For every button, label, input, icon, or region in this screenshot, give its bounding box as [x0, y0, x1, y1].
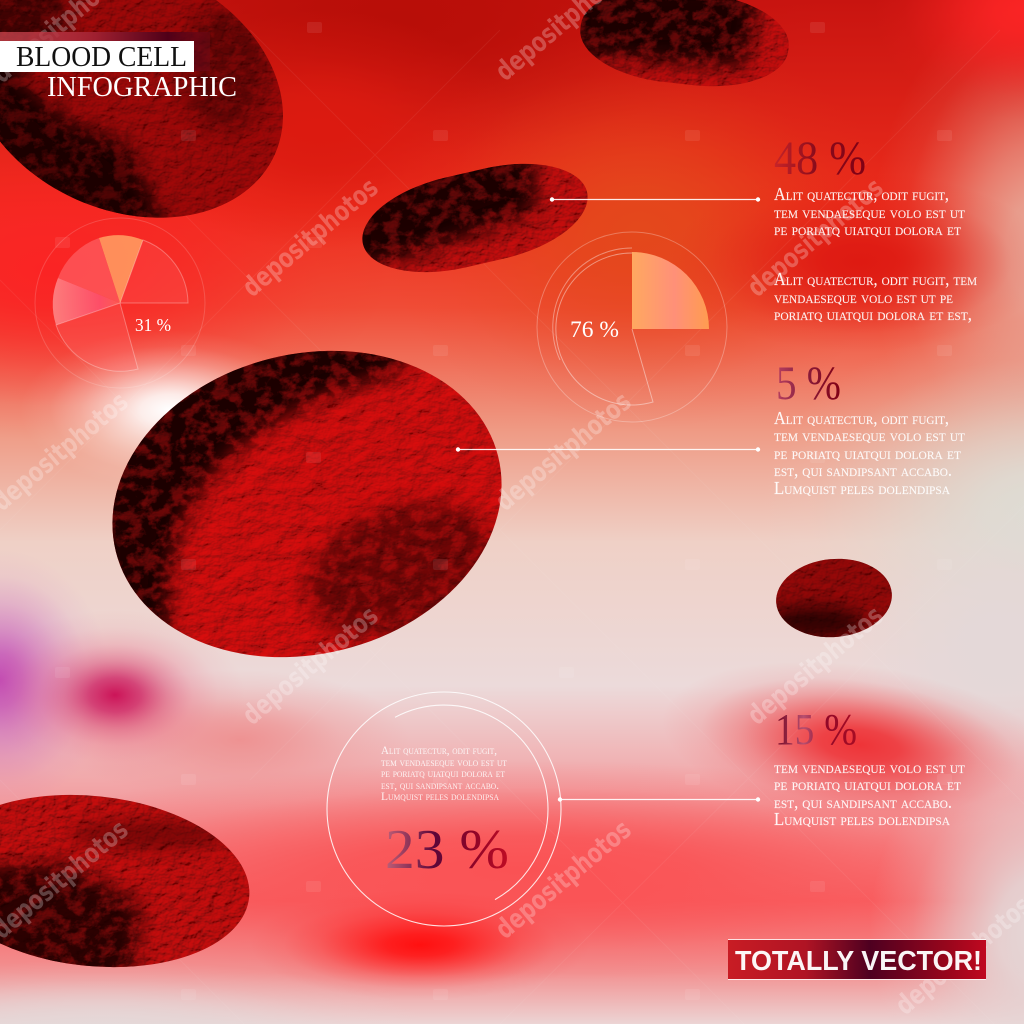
- callout text: Alit quatectur, odit fugit,: [381, 743, 497, 757]
- callout text: tem vendaeseque volo est ut: [381, 755, 507, 769]
- stat: 15 percent: [774, 705, 966, 829]
- 76 percent label: 76 %: [570, 317, 619, 342]
- callout text: est, qui sandipsant accabo.: [381, 778, 499, 792]
- text block: 48 percent: Alit quatectur, odit fugit,: [774, 184, 949, 204]
- red cell: top left: [0, 0, 283, 218]
- text block: 15 percent: Lumquist peles dolendipsa: [774, 809, 950, 829]
- watermark: depositphotos repeated: depositphotos: [742, 172, 889, 303]
- red cell: right small: [776, 558, 892, 638]
- stat: 5 percent: 5 %: [776, 357, 841, 410]
- watermark: depositphotos repeated: depositphotos: [742, 600, 889, 731]
- 31 percent label: 31 %: [135, 315, 171, 335]
- stat: 48 percent: 48 %: [774, 132, 866, 185]
- callout text: Lumquist peles dolendipsa: [381, 789, 499, 803]
- text block: 5 percent: tem vendaeseque volo est ut: [774, 425, 966, 445]
- watermark: depositphotos repeated: depositphotos: [237, 172, 384, 303]
- pie chart: 76 percent: [537, 232, 727, 422]
- text block: 5 percent: Lumquist peles dolendipsa: [774, 478, 950, 498]
- text block: middle paragraph: [774, 269, 977, 324]
- title: BLOOD CELL: [16, 41, 187, 73]
- stat: 15 percent: 15 %: [775, 705, 857, 754]
- text block: 5 percent: Alit quatectur, odit fugit,: [774, 408, 949, 428]
- pie chart: 31 percent: [35, 218, 205, 388]
- text block: middle paragraph: poriatq uiatqui dolora et est,: [774, 304, 972, 324]
- title: [0, 32, 237, 103]
- text block: 48 percent: [774, 184, 966, 239]
- badge: totally vector: TOTALLY VECTOR!: [735, 945, 982, 976]
- text block: 15 percent: est, qui sandipsant accabo.: [774, 792, 952, 812]
- text block: 5 percent: est, qui sandipsant accabo.: [774, 460, 952, 480]
- connector: large cell to 5 percent: [456, 447, 760, 452]
- text block: middle paragraph: vendaeseque volo est ut pe: [774, 287, 953, 307]
- red cell: bottom left: [0, 794, 250, 968]
- title: INFOGRAPHIC: [47, 71, 237, 103]
- text block: 15 percent: pe poriatq uiatqui dolora et: [774, 774, 962, 794]
- text block: 15 percent: tem vendaeseque volo est ut: [774, 757, 966, 777]
- connector: small cell to 48 percent: [550, 197, 760, 202]
- red cell: top right: [580, 0, 789, 86]
- callout text: [381, 743, 507, 803]
- watermark: depositphotos repeated: depositphotos: [490, 386, 637, 517]
- stat: 5 percent: [774, 357, 966, 498]
- text block: 5 percent: pe poriatq uiatqui dolora et: [774, 443, 962, 463]
- text block: 48 percent: pe poriatq uiatqui dolora et: [774, 219, 962, 239]
- 23 percent label: 23 %: [385, 819, 509, 881]
- circle callout: 23 percent: [327, 692, 561, 926]
- text block: 48 percent: tem vendaeseque volo est ut: [774, 202, 966, 222]
- text block: 5 percent: [774, 408, 966, 498]
- watermark: depositphotos repeated: depositphotos: [490, 814, 637, 945]
- red cell: centre small: [362, 164, 588, 272]
- watermark: depositphotos repeated: depositphotos: [237, 600, 384, 731]
- connector: circle callout to 15 percent: [558, 797, 760, 802]
- text block: middle paragraph: Alit quatectur, odit fugit, tem: [774, 269, 977, 289]
- text block: 15 percent: [774, 757, 966, 829]
- stat: 48 percent: [774, 132, 966, 239]
- red cell: large centre: [112, 350, 502, 658]
- callout text: pe poriatq uiatqui dolora et: [381, 766, 505, 780]
